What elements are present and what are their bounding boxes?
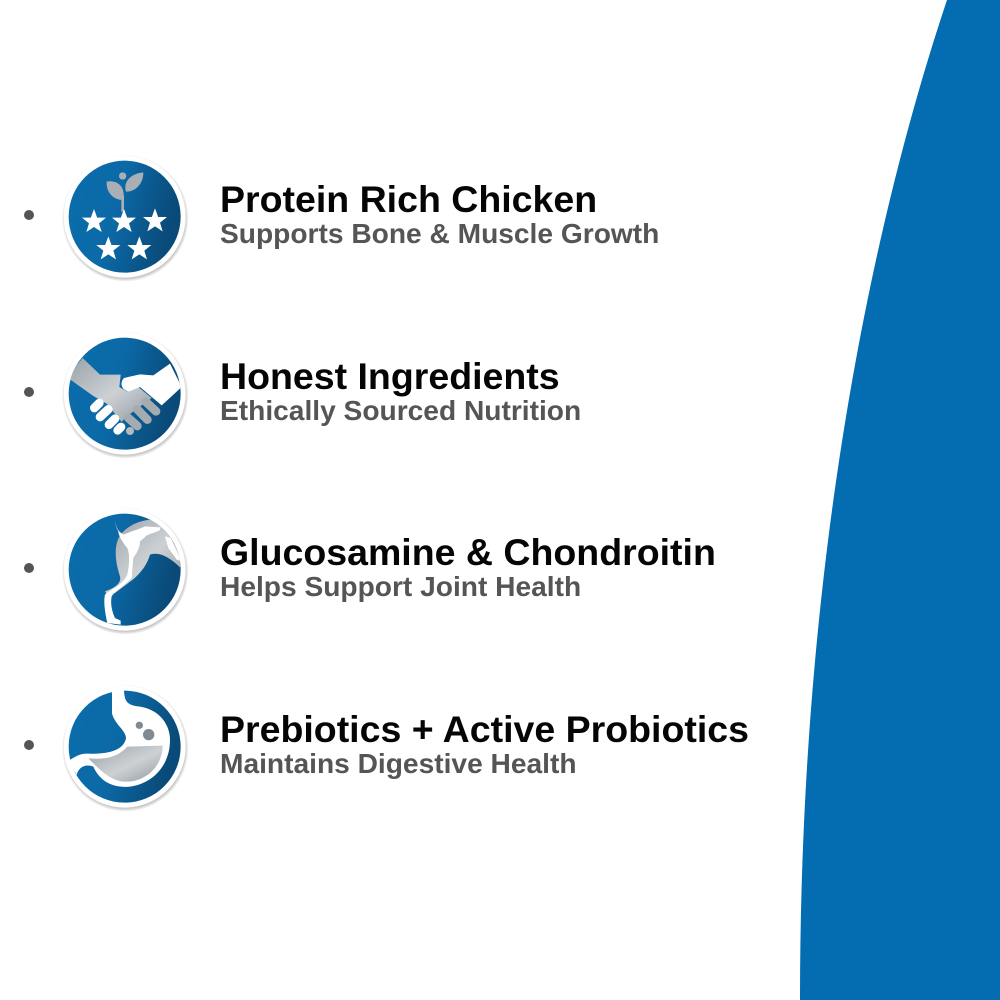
icon part: sprout (107, 172, 143, 212)
text block: digestion (220, 708, 749, 779)
blue curved panel (800, 0, 1000, 1000)
bullet 1 (24, 210, 34, 220)
bullet 2 (24, 387, 34, 397)
icon: plant and five stars (62, 155, 189, 282)
heading: Protein Rich Chicken (220, 178, 597, 220)
icon part: horse silhouette (104, 516, 182, 625)
icon part: silver arm (67, 358, 182, 422)
icon part: stomach outline (68, 688, 170, 787)
icon part: stomach contents (88, 746, 163, 782)
icon part: fingers (94, 402, 156, 435)
icon part: stars (82, 208, 167, 259)
heading: Glucosamine & Chondroitin (220, 531, 716, 573)
text block: protein (220, 178, 659, 249)
icon part: bubbles (136, 722, 154, 740)
icon: horse hindquarter (62, 508, 189, 635)
text block: joints (220, 531, 716, 602)
subheading: Supports Bone & Muscle Growth (220, 218, 659, 249)
bullet 3 (24, 563, 34, 573)
icon: stomach (62, 685, 189, 812)
subheading: Helps Support Joint Health (220, 571, 581, 602)
subheading: Maintains Digestive Health (220, 748, 577, 779)
text block: ingredients (220, 355, 581, 426)
icon: handshake (62, 332, 189, 459)
bullet 4 (24, 740, 34, 750)
heading: Honest Ingredients (220, 355, 560, 397)
subheading: Ethically Sourced Nutrition (220, 395, 581, 426)
heading: Prebiotics + Active Probiotics (220, 708, 749, 750)
